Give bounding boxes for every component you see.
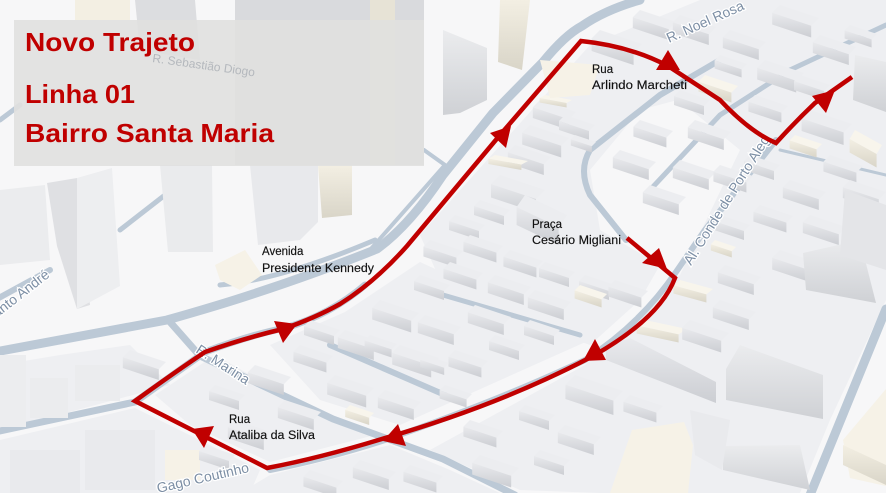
bus route line — [135, 41, 852, 468]
faint street name: R. Sebastião Diogo — [152, 51, 256, 79]
title: Novo Trajeto: Novo Trajeto — [25, 27, 195, 57]
label: Praça Cesário Migliani: Cesário Migliani — [532, 235, 621, 247]
label: Al. Conde de Porto Alegre: Al. Conde de Porto Aleg — [680, 132, 773, 268]
map labels — [229, 64, 687, 442]
label: Rua Arlindo Marcheti: Rua — [592, 64, 613, 76]
title: Linha 01: Linha 01 — [25, 79, 135, 109]
label: Rua Ataliba da Silva: Ataliba da Silva — [229, 430, 316, 442]
road: Avenida Presidente Kennedy — [0, 0, 640, 352]
tall buildings — [0, 0, 886, 309]
blocks: lower right neighbourhood — [463, 250, 819, 488]
blocks: lower left neighbourhood — [0, 350, 443, 493]
label: Rua Arlindo Marcheti: Arlindo Marcheti — [592, 80, 687, 92]
label: R. Marina: R. Marina — [193, 341, 253, 388]
direction arrowheads — [192, 50, 835, 448]
large lower right buildings — [606, 338, 886, 493]
blocks: central neighbourhood — [209, 95, 648, 450]
label: Praça Cesário Migliani: Praça — [532, 219, 562, 231]
label: Avenida Presidente Kennedy: Avenida — [262, 246, 303, 258]
title: Bairro Santa Maria: Bairro Santa Maria — [25, 118, 275, 148]
label: Avenida Presidente Kennedy: Presidente Kennedy — [262, 263, 374, 275]
title panel — [14, 20, 424, 166]
label: Rua Ataliba da Silva: Rua — [229, 414, 250, 426]
blocks: upper right neighbourhood — [592, 5, 886, 258]
